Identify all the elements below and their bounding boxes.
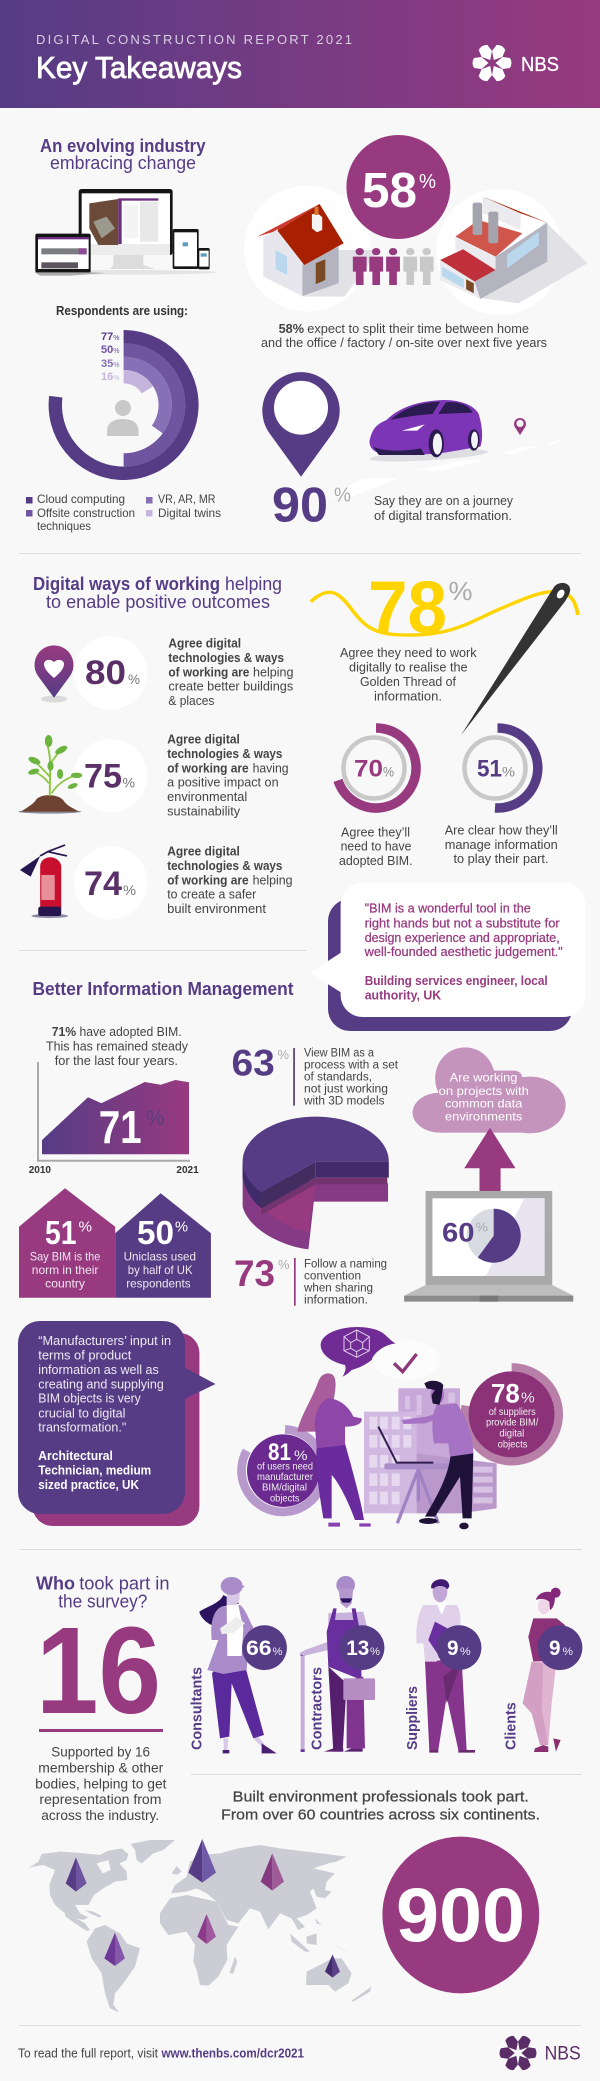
ring: 70 percent bbox=[338, 728, 416, 808]
bubble: 9 percent suppliers bbox=[437, 1625, 481, 1670]
text: digital transformation: of digital transformation. bbox=[374, 508, 512, 523]
pin: africa bbox=[197, 1914, 216, 1944]
chart: radial bars bbox=[55, 331, 192, 473]
stat: 90 percent bbox=[272, 479, 351, 533]
bubble: 13 percent: % bbox=[370, 1646, 380, 1658]
stat: 58 percent circle: % bbox=[419, 171, 436, 193]
row: 74 percent: built environment bbox=[167, 902, 267, 916]
row: 74 percent: 74 bbox=[84, 865, 122, 903]
speech bubble bbox=[321, 1327, 396, 1377]
row: 80 percent: Agree digital bbox=[168, 637, 241, 651]
icon: car bbox=[369, 400, 488, 464]
text: manage information: Are clear how they’ll bbox=[445, 823, 558, 838]
row: 75 percent: sustainability bbox=[167, 805, 241, 819]
stat: 78 percent text: provide BIM/ bbox=[486, 1417, 538, 1429]
NBS logo: NBS bbox=[521, 54, 559, 76]
bubble: 66 percent: 66 bbox=[246, 1637, 272, 1660]
stat: 51 percent house: % bbox=[78, 1219, 92, 1236]
row: 80 percent: % bbox=[128, 671, 140, 687]
callout: BIM quote: well-founded aesthetic judgement." bbox=[364, 945, 563, 959]
row: 80 percent: helping bbox=[253, 665, 294, 679]
stat: 16 bodies: bodies, helping to get bbox=[35, 1776, 167, 1791]
stat: 73 percent: 73 bbox=[234, 1253, 275, 1294]
bubble: 13 percent bbox=[340, 1625, 384, 1670]
callout: BIM quote: right hands but not a substitute for bbox=[365, 916, 560, 930]
chart legend: techniques bbox=[37, 519, 91, 533]
ring: 81 percent bbox=[242, 1429, 324, 1512]
heading: to enable positive outcomes bbox=[46, 591, 270, 612]
illustration: golden thread and needle bbox=[311, 583, 578, 735]
text: adopted BIM: need to have bbox=[341, 839, 411, 854]
row: 75 percent: % bbox=[122, 774, 135, 790]
stat: 900 circle: 900 bbox=[396, 1874, 525, 1959]
row: 74 percent: of working are bbox=[167, 873, 249, 887]
stat: 50 percent house bbox=[115, 1193, 211, 1298]
bubble: 13 percent: 13 bbox=[346, 1637, 369, 1660]
icon: pin with heart bbox=[34, 645, 74, 702]
figure: contractor: Contractors bbox=[310, 1667, 326, 1750]
stat: 81 percent text: BIM/digital bbox=[262, 1481, 307, 1493]
row: 75 percent: technologies & ways bbox=[167, 747, 282, 761]
row: 80 percent: create better buildings bbox=[168, 680, 293, 694]
row: 74 percent: % bbox=[123, 882, 136, 898]
stat: 51 percent house: Say BIM is the bbox=[30, 1250, 101, 1264]
chart legend: Digital twins bbox=[158, 506, 221, 520]
text: adopted BIM: Agree they’ll bbox=[341, 825, 410, 840]
stat: 81 percent text: 81 bbox=[268, 1439, 291, 1466]
icon: check mark bbox=[394, 1354, 417, 1372]
callout: manufacturers quote: Architectural bbox=[38, 1448, 113, 1463]
header banner bbox=[0, 0, 600, 108]
report label: DIGITAL CONSTRUCTION REPORT 2021 bbox=[36, 32, 352, 47]
text: manage information: manage information bbox=[445, 837, 558, 852]
stat: 78 percent text bbox=[486, 1379, 538, 1450]
bubble: 9 percent suppliers: 9 bbox=[447, 1637, 458, 1660]
row: 74 percent: technologies & ways bbox=[167, 859, 282, 873]
icon: plant bbox=[18, 735, 82, 814]
icon: fire extinguisher bbox=[20, 845, 68, 918]
stat: 78 percent: 78 bbox=[368, 566, 447, 649]
caption: split time bbox=[261, 321, 547, 350]
NBS logo bbox=[472, 43, 559, 83]
heading: Better Information Management bbox=[32, 978, 294, 999]
stat: 73 percent: convention bbox=[304, 1270, 361, 1282]
stat: 51 percent house bbox=[19, 1188, 115, 1298]
stat: 16 bodies bbox=[35, 1603, 167, 1823]
pin: asia bbox=[261, 1853, 284, 1891]
chart: area 71 percent: 71 bbox=[99, 1101, 142, 1153]
row: 75 percent: of working are bbox=[167, 761, 249, 775]
stat: 78 percent text: 78 bbox=[491, 1379, 520, 1409]
stat: 73 percent: information. bbox=[304, 1294, 368, 1306]
heading bbox=[33, 573, 282, 612]
stat: 63 percent: View BIM as a bbox=[304, 1048, 375, 1060]
stat: 78 percent: % bbox=[448, 576, 472, 606]
stat: 63 percent: not just working bbox=[304, 1084, 388, 1096]
stat: 50 percent house: % bbox=[175, 1219, 188, 1236]
buildings bbox=[364, 1388, 497, 1513]
heading: took part in bbox=[79, 1572, 170, 1593]
figure: consultant: Consultants bbox=[190, 1667, 206, 1750]
callout: manufacturers quote: BIM objects is very bbox=[38, 1391, 141, 1406]
stat: 50 percent house: Uniclass used bbox=[124, 1250, 196, 1264]
illustration: laptop 60 percent: % bbox=[476, 1220, 488, 1235]
heading: Who bbox=[36, 1572, 75, 1593]
callout: manufacturers quote: Technician, medium bbox=[38, 1463, 151, 1478]
text: BIM adoption: 71% have adopted BIM. bbox=[52, 1024, 182, 1039]
bubble: 66 percent bbox=[242, 1625, 287, 1670]
chart: area 71 percent: % bbox=[146, 1107, 164, 1130]
callout: manufacturers quote: terms of product bbox=[38, 1347, 132, 1362]
chart legend: Offsite construction bbox=[37, 506, 135, 520]
chart legend bbox=[26, 492, 221, 533]
callout: manufacturers quote bbox=[18, 1321, 216, 1526]
row: 74 percent: helping bbox=[253, 873, 293, 887]
stat: 78 percent text: of suppliers bbox=[489, 1406, 536, 1418]
footer bbox=[18, 2034, 581, 2072]
row: 75 percent: a positive impact on bbox=[167, 776, 279, 790]
text: read the report bbox=[18, 2045, 304, 2060]
pin: south america bbox=[104, 1933, 125, 1966]
icon: small map pin bbox=[514, 418, 526, 435]
bubble: 9 percent clients: % bbox=[562, 1646, 573, 1658]
icon: cloud: Are working bbox=[450, 1071, 517, 1085]
stat: 81 percent text: of users need bbox=[257, 1460, 313, 1472]
stat: 16 bodies: across the industry. bbox=[41, 1808, 159, 1823]
stat: 16 bodies: representation from bbox=[39, 1792, 162, 1807]
ring: 70 percent: 70 bbox=[354, 756, 383, 783]
chart: radial bars: 77% bbox=[101, 331, 119, 343]
figure: client: Clients bbox=[504, 1702, 520, 1750]
bubble: 9 percent clients bbox=[538, 1625, 582, 1670]
stat: 81 percent text: % bbox=[294, 1447, 308, 1463]
callout: manufacturers quote: crucial to digital bbox=[38, 1405, 126, 1420]
row: 75 percent: having bbox=[253, 761, 289, 775]
heading: An evolving industry bbox=[40, 135, 206, 156]
callout: BIM quote: authority, UK bbox=[365, 988, 441, 1002]
ring: 51 percent: % bbox=[502, 764, 515, 780]
text: read the report: To read the full report, visit bbox=[18, 2045, 158, 2060]
pin: north america bbox=[66, 1857, 87, 1892]
section: who took part bbox=[35, 1572, 582, 1823]
ring: 70 percent: % bbox=[383, 764, 394, 780]
callout: manufacturers quote: sized practice, UK bbox=[38, 1477, 139, 1492]
icon: cloud: on projects with bbox=[439, 1084, 529, 1098]
illustration: laptop 60 percent bbox=[404, 1191, 573, 1302]
stat: 81 percent text: objects bbox=[270, 1493, 300, 1505]
world map with pins bbox=[28, 1839, 372, 2012]
chart legend: VR, AR, MR bbox=[158, 492, 216, 506]
icon: road dashes bbox=[329, 440, 563, 497]
row: 80 percent: technologies & ways bbox=[168, 651, 284, 665]
row: 80 percent: & places bbox=[168, 694, 214, 708]
caption: split time: and the office / factory / on-site over next five years bbox=[261, 335, 547, 350]
row: 74 percent bbox=[20, 845, 293, 919]
heading: Digital ways of working bbox=[33, 573, 220, 594]
heading: the survey? bbox=[58, 1590, 147, 1611]
stat: 50 percent house: by half of UK bbox=[128, 1263, 192, 1277]
section: better information management bbox=[18, 978, 573, 1529]
figure: woman bbox=[297, 1373, 371, 1527]
text: adopted BIM bbox=[339, 825, 412, 868]
stat: 16 bodies: 16 bbox=[36, 1603, 161, 1740]
pin: europe bbox=[188, 1839, 216, 1883]
text: digital transformation bbox=[374, 493, 513, 523]
text: manage information: to play their part. bbox=[454, 851, 548, 866]
bubble: 9 percent clients: 9 bbox=[549, 1637, 560, 1660]
heading bbox=[40, 135, 206, 173]
caption: split time: expect to split their time between home bbox=[307, 321, 529, 336]
illustration: two people with buildings bbox=[242, 1327, 559, 1529]
pin: australia bbox=[325, 1954, 340, 1978]
icon: devices bbox=[35, 189, 217, 276]
row: 75 percent: 75 bbox=[84, 757, 122, 795]
illustration: laptop 60 percent: 60 bbox=[442, 1218, 474, 1248]
row: 75 percent: Agree digital bbox=[167, 733, 240, 747]
heading: embracing change bbox=[50, 152, 196, 173]
table and laptop bbox=[378, 1427, 452, 1523]
chart: area 71 percent: 2021 bbox=[176, 1164, 199, 1176]
callout: BIM quote: Building services engineer, local bbox=[365, 974, 548, 988]
arrow: laptop to cloud bbox=[464, 1128, 516, 1192]
section: evolving industry bbox=[26, 135, 587, 533]
text: read the report: www.thenbs.com/dcr2021 bbox=[161, 2045, 304, 2060]
text: built environment professionals: Built environment professionals took part. bbox=[233, 1790, 529, 1806]
row: 74 percent: Agree digital bbox=[167, 845, 240, 859]
callout: manufacturers quote: creating and supplying bbox=[38, 1376, 164, 1391]
figure: man bbox=[402, 1381, 473, 1529]
callout: BIM quote: "BIM is a wonderful tool in the bbox=[365, 902, 531, 916]
icon: cloud bbox=[413, 1047, 566, 1133]
stat: 63 percent bbox=[232, 1043, 399, 1108]
chart: 3D pie bbox=[243, 1117, 389, 1249]
icon: location pin bbox=[262, 372, 340, 477]
text: BIM adoption: This has remained steady bbox=[46, 1039, 188, 1054]
text: golden thread: information. bbox=[374, 689, 442, 704]
stat: 58 percent circle: 58 bbox=[362, 164, 417, 218]
chart: radial bars: 35% bbox=[101, 358, 119, 370]
figure: contractor bbox=[299, 1576, 384, 1752]
bubble: 9 percent suppliers: % bbox=[460, 1646, 471, 1658]
stat: 51 percent house: norm in their bbox=[32, 1263, 98, 1277]
figure: consultant bbox=[190, 1577, 287, 1753]
text: golden thread bbox=[340, 645, 477, 704]
caption: split time: 58% bbox=[279, 321, 304, 336]
stat: 90 percent: % bbox=[334, 485, 351, 507]
stat: 78 percent text: % bbox=[521, 1390, 535, 1407]
icon: cloud: common data bbox=[445, 1097, 523, 1111]
section: digital ways of working bbox=[18, 566, 578, 919]
callout: BIM quote: design experience and appropriate, bbox=[365, 931, 560, 945]
stat: 81 percent text: manufacturer bbox=[257, 1471, 313, 1483]
stat: 63 percent: % bbox=[278, 1047, 289, 1062]
stat: 73 percent: when sharing bbox=[303, 1282, 373, 1294]
stat: 900 circle bbox=[382, 1837, 539, 1993]
callout: BIM quote bbox=[310, 883, 586, 1031]
ring: 51 percent: 51 bbox=[477, 756, 502, 783]
bubble: 66 percent: % bbox=[272, 1646, 283, 1658]
stat: 81 percent text bbox=[257, 1439, 313, 1505]
ring: 78 percent bbox=[465, 1367, 559, 1461]
text: built environment professionals: From over 60 countries across six continents. bbox=[221, 1807, 540, 1823]
text: golden thread: Golden Thread of bbox=[360, 674, 456, 689]
text: BIM adoption bbox=[46, 1024, 188, 1068]
text: golden thread: digitally to realise the bbox=[349, 660, 468, 675]
heading: helping bbox=[225, 573, 282, 594]
stat: 51 percent house: 51 bbox=[45, 1214, 76, 1251]
stat: 63 percent: process with a set bbox=[304, 1060, 399, 1072]
chart: area 71 percent bbox=[29, 1062, 199, 1176]
callout: manufacturers quote: transformation." bbox=[38, 1420, 127, 1435]
text: manage information bbox=[445, 823, 558, 866]
text: golden thread: Agree they need to work bbox=[340, 645, 477, 660]
stat: 73 percent: Follow a naming bbox=[304, 1258, 387, 1270]
text: adopted BIM: adopted BIM. bbox=[339, 853, 412, 868]
row: 80 percent bbox=[34, 636, 294, 709]
title: Key Takeaways bbox=[36, 50, 242, 85]
figure: supplier bbox=[405, 1579, 481, 1753]
stat: 51 percent house: country bbox=[45, 1276, 85, 1290]
icon: people row bbox=[353, 248, 434, 285]
NBS logo: NBS bbox=[545, 2044, 581, 2065]
callout: manufacturers quote: information as well as bbox=[38, 1362, 159, 1377]
figure: supplier: Suppliers bbox=[405, 1686, 421, 1750]
row: 75 percent bbox=[18, 733, 289, 819]
stat: 78 percent text: objects bbox=[498, 1438, 528, 1450]
chart: radial bars: 50% bbox=[101, 344, 119, 356]
text: BIM adoption: for the last four years. bbox=[55, 1053, 178, 1068]
callout: manufacturers quote: “Manufacturers’ input in bbox=[38, 1333, 171, 1348]
chart legend: Cloud computing bbox=[37, 492, 125, 506]
text: built environment professionals bbox=[221, 1790, 540, 1823]
row: 75 percent: environmental bbox=[167, 790, 247, 804]
stat: 58 percent circle bbox=[346, 135, 450, 239]
illustration: factory bbox=[436, 189, 587, 315]
stat: 50 percent house: 50 bbox=[137, 1214, 174, 1251]
stat: 90 percent: 90 bbox=[272, 479, 328, 533]
chart: radial bars: 16% bbox=[101, 371, 119, 383]
row: 74 percent: to create a safer bbox=[167, 888, 256, 902]
stat: 78 percent text: digital bbox=[499, 1428, 524, 1440]
ring: 51 percent bbox=[464, 728, 538, 808]
stat: 73 percent bbox=[234, 1253, 387, 1306]
row: 80 percent: of working are bbox=[168, 665, 249, 679]
stat: 63 percent: of standards, bbox=[304, 1072, 372, 1084]
illustration: house bbox=[244, 186, 379, 312]
row: 80 percent: 80 bbox=[85, 654, 126, 692]
chart: area 71 percent: 2010 bbox=[29, 1164, 51, 1176]
stat: 50 percent house: respondents bbox=[126, 1276, 191, 1290]
stat: 16 bodies: membership & other bbox=[38, 1760, 164, 1775]
figure: client bbox=[504, 1588, 582, 1752]
stat: 73 percent: % bbox=[278, 1257, 290, 1272]
icon: cloud: environments bbox=[445, 1110, 522, 1124]
stat: 63 percent: with 3D models bbox=[303, 1096, 385, 1108]
stat: 16 bodies: Supported by 16 bbox=[51, 1745, 150, 1760]
NBS logo bbox=[499, 2034, 581, 2072]
stat: 63 percent: 63 bbox=[232, 1043, 275, 1084]
text: digital transformation: Say they are on a journey bbox=[374, 493, 513, 508]
heading bbox=[36, 1572, 170, 1611]
label: respondents: Respondents are using: bbox=[56, 303, 188, 318]
